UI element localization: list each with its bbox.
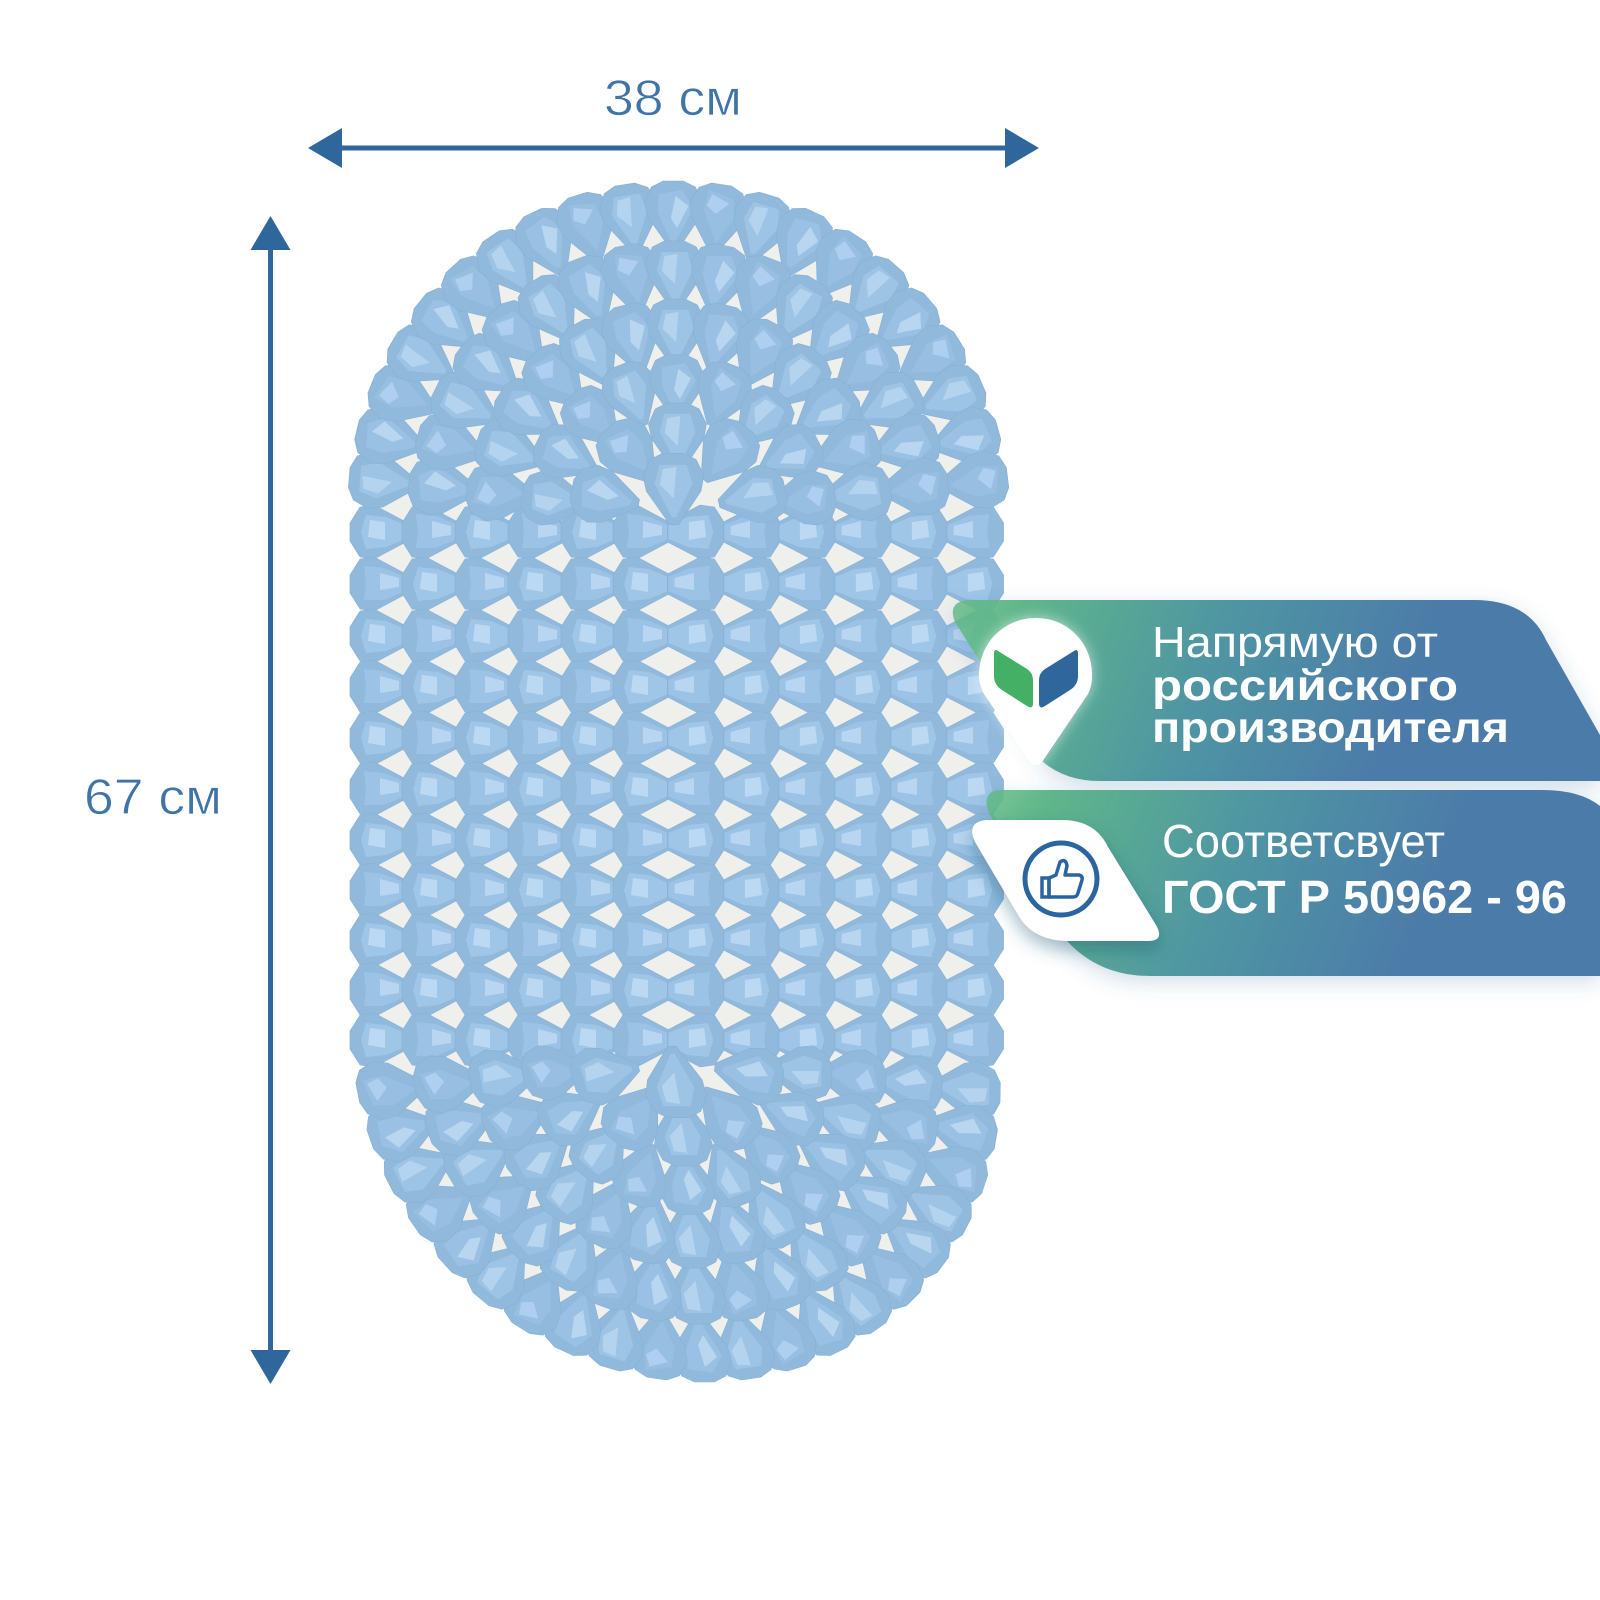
arrow: width dimension [308,128,1039,168]
central grid of bow-tie beads [350,505,1004,1067]
bath mat product photo [341,180,1029,1383]
width label: 38 см: 38 см [604,70,742,126]
banner background [953,600,1600,781]
banner text [1162,815,1567,923]
icon card: thumbs up [972,820,1159,941]
banner text: ГОСТ Р 50962 - 96 [1162,871,1567,923]
banner text [1152,618,1509,752]
banner text: Соответсвует [1162,815,1445,867]
banner text: производителя [1152,704,1509,752]
top cap: concentric teardrop rings [341,180,1012,532]
banner text: российского [1152,662,1458,710]
banner text: Напрямую от [1152,618,1438,667]
icon: location pin with leaves [979,618,1092,766]
mat backing seen through the gaps [372,205,990,1360]
panel: direct from Russian manufacturer [953,600,1600,781]
arrow: height dimension [250,216,290,1384]
height label: 67 см: 67 см [84,769,222,825]
bottom cap: concentric teardrop rings [350,1039,1029,1383]
panel: GOST compliance [972,790,1600,976]
banner background [986,790,1600,976]
